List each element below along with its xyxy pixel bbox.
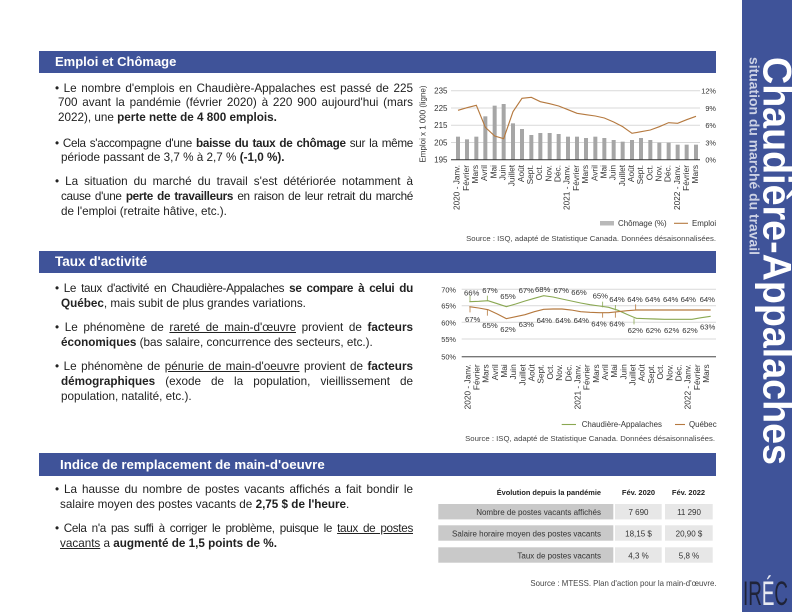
- data labels: 64%: [627, 295, 643, 304]
- data labels: 66%: [571, 288, 587, 297]
- month labels: 2021 - Janv.: [572, 364, 582, 409]
- text: salaire moyen des postes vacants de 2,75 $ de l'heure.: [60, 498, 349, 510]
- text block: indice de remplacement: [55, 482, 413, 550]
- legend: Chaudière-Appalaches: [582, 420, 662, 429]
- heading: Emploi et Chômage: Emploi et Chômage: [55, 54, 176, 69]
- data labels: 63%: [700, 323, 716, 332]
- month labels: Sept.: [525, 165, 535, 184]
- month labels: Mars: [591, 364, 601, 383]
- month labels: Juillet: [507, 164, 517, 186]
- axis labels: [441, 285, 456, 362]
- data labels: 68%: [535, 285, 551, 294]
- table row: postes vacants: [438, 504, 713, 519]
- month labels: Février: [681, 165, 691, 191]
- data labels: 62%: [628, 326, 643, 335]
- text: cause d'une perte de travailleurs en raison de leur retrait du marché: [61, 190, 413, 202]
- table row: postes vacants: Nombre de postes vacants affichés: [476, 508, 601, 517]
- data labels: 66%: [464, 288, 480, 298]
- heading: Taux d'activité: [39, 251, 716, 273]
- month labels: 2022 - Janv.: [683, 364, 693, 409]
- month labels: Juillet: [517, 364, 527, 386]
- table row: taux: 4,3 %: [628, 551, 649, 560]
- data labels: 64%: [591, 319, 607, 328]
- month labels: Avril: [589, 165, 599, 181]
- month labels: Mai: [609, 364, 619, 378]
- month labels: Nov.: [554, 364, 564, 381]
- data labels: 64%: [663, 295, 679, 304]
- month labels: Sept.: [646, 364, 656, 384]
- source: chart taux d'activité: Source : ISQ, adapté de Statistique Canada. Données désaisonnalisées.: [465, 434, 715, 443]
- month labels: Juin: [618, 364, 628, 380]
- axis labels: [418, 85, 716, 165]
- axis labels: 70%: [441, 285, 456, 294]
- month labels: Nov.: [653, 165, 663, 181]
- heading: Indice de remplacement: Indice de remplacement de main-d'oeuvre: [60, 457, 325, 472]
- axis labels: 0%: [705, 156, 716, 165]
- month labels: Déc.: [673, 364, 683, 381]
- month labels: Oct.: [545, 364, 555, 380]
- axis labels: 3%: [705, 138, 716, 148]
- axis labels: 205: [434, 138, 448, 148]
- axis labels: 65%: [441, 302, 456, 311]
- table row: postes vacants: 11 290: [677, 508, 701, 517]
- month labels: Nov.: [543, 165, 553, 181]
- text: de l'emploi (retraite hâtive, etc.).: [61, 204, 227, 218]
- month labels: Avril: [479, 165, 489, 181]
- month labels: Sept.: [635, 165, 645, 184]
- data labels: 64%: [574, 316, 589, 325]
- text: 700 avant la pandémie (février 2020) à 220 900 aujourd'hui (mars: [58, 96, 413, 109]
- sidebar subtitle: situation du marché du travail: [746, 57, 762, 255]
- axis labels: 60%: [441, 318, 456, 327]
- text: • Cela s'accompagne d'une baisse du taux de chômage sur la même: [55, 136, 413, 150]
- text: • Le taux d'activité en Chaudière-Appalaches se compare à celui du: [55, 282, 413, 294]
- month labels: Août: [626, 164, 636, 182]
- table row: salaire: [438, 525, 713, 541]
- data labels: 65%: [593, 292, 608, 301]
- text: • Le phénomène de pénurie de main-d'oeuvre provient de facteurs: [55, 360, 413, 372]
- table row: salaire: 20,90 $: [676, 529, 703, 538]
- data labels: 64%: [609, 319, 625, 328]
- month labels: Mars: [690, 165, 700, 183]
- month labels: 2020 - Janv.: [462, 364, 472, 409]
- axis labels: 215: [434, 121, 448, 130]
- table row: taux: 5,8 %: [679, 551, 699, 560]
- month labels: Juin: [608, 165, 618, 180]
- legend: Emploi: [692, 219, 716, 228]
- month labels: Février: [692, 364, 702, 390]
- legend: [600, 219, 716, 228]
- data labels: 64%: [700, 295, 715, 304]
- axis labels: 12%: [701, 87, 716, 96]
- month labels: Mars: [701, 364, 711, 383]
- month labels: Avril: [490, 364, 500, 380]
- source: chart emploi: Source : ISQ, adapté de Statistique Canada. Données désaisonnalisées.: [466, 234, 716, 243]
- text: • Le phénomène de rareté de main-d'œuvre provient de facteurs: [55, 320, 413, 334]
- data labels: [464, 285, 716, 335]
- data labels: 65%: [500, 292, 516, 301]
- month labels: Mai: [598, 165, 608, 178]
- axis labels: 225: [434, 104, 448, 113]
- month labels: Déc.: [553, 165, 563, 182]
- text: population, natalité, etc.).: [61, 390, 192, 402]
- table row: salaire: Salaire horaire moyen des postes vacants: [452, 529, 601, 538]
- data labels: 63%: [519, 320, 534, 329]
- data labels: 64%: [537, 316, 552, 325]
- month labels: [462, 364, 711, 409]
- month labels: Déc.: [563, 364, 573, 381]
- table row: taux: Taux de postes vacants: [517, 551, 601, 560]
- month labels: Oct.: [534, 165, 544, 180]
- table: évolution depuis la pandémie: Fév. 2020: [622, 488, 655, 497]
- month labels: Mai: [488, 165, 498, 178]
- month labels: Août: [516, 164, 526, 182]
- axis labels: Emploi x 1 000 (ligne): [418, 85, 428, 162]
- month labels: Août: [637, 364, 647, 381]
- text: 2022), une perte nette de 4 800 emplois.: [58, 111, 277, 124]
- axis labels: 235: [434, 87, 448, 96]
- table row: postes vacants: 7 690: [628, 508, 649, 517]
- month labels: Oct.: [644, 165, 654, 180]
- data labels: 67%: [482, 286, 498, 295]
- axis labels: 50%: [441, 353, 456, 362]
- month labels: Août: [527, 364, 537, 381]
- month labels: 2020 - Janv.: [452, 165, 462, 210]
- month labels: Mai: [499, 364, 509, 378]
- data labels: 67%: [554, 286, 569, 295]
- heading: Taux d'activité: Taux d'activité: [55, 254, 147, 269]
- axis labels: 195: [434, 156, 448, 165]
- text: • Le nombre d'emplois en Chaudière-Appalaches est passé de 225: [55, 82, 413, 94]
- chart: emploi et chômage: [418, 85, 716, 228]
- table: évolution depuis la pandémie: Évolution depuis la pandémie: [497, 488, 601, 497]
- month labels: 2022 - Janv.: [672, 165, 682, 210]
- table row: taux: [438, 547, 713, 563]
- table: évolution depuis la pandémie: Fév. 2022: [672, 488, 705, 497]
- month labels: Février: [571, 165, 581, 191]
- text: vacants a augmenté de 1,5 points de %.: [60, 536, 277, 550]
- heading: Indice de remplacement: [39, 453, 716, 476]
- chart: taux d'activité: [441, 285, 717, 429]
- data labels: 64%: [555, 316, 571, 325]
- month labels: Juillet: [617, 164, 627, 186]
- axis labels: 6%: [705, 121, 716, 130]
- source: table: Source : MTESS. Plan d'action pour la main-d'œuvre.: [530, 579, 716, 588]
- data labels: 62%: [500, 325, 516, 334]
- data labels: 65%: [482, 321, 498, 330]
- text: démographiques (exode de la population, vieillissement de: [61, 374, 413, 388]
- month labels: Juillet: [628, 364, 638, 386]
- text: • La situation du marché du travail s'est détériorée notamment à: [55, 174, 413, 188]
- month labels: Oct.: [655, 364, 665, 380]
- data labels: 64%: [681, 295, 696, 304]
- data labels: 67%: [465, 315, 481, 324]
- month labels: Avril: [600, 364, 610, 380]
- text: Québec, mais subit de plus grandes variations.: [61, 296, 306, 310]
- text block: taux d'activité: [55, 282, 413, 402]
- text: • Cela n'a pas suffi à corriger le problème, puisque le taux de postes: [55, 522, 413, 534]
- month labels: Février: [461, 165, 471, 191]
- data labels: 62%: [646, 326, 661, 335]
- month labels: Juin: [508, 364, 518, 380]
- text: • La hausse du nombre de postes vacants affichés a fait bondir le: [55, 482, 413, 496]
- heading: Emploi et Chômage: [39, 51, 716, 73]
- text: période passant de 3,7 % à 2,7 % (-1,0 %).: [61, 150, 284, 164]
- month labels: Février: [472, 364, 482, 390]
- data labels: 64%: [645, 295, 661, 304]
- legend: Québec: [689, 420, 717, 429]
- month labels: Février: [582, 364, 592, 390]
- month labels: Sept.: [536, 364, 546, 384]
- table row: salaire: 18,15 $: [625, 529, 652, 538]
- month labels: Mars: [470, 165, 480, 183]
- axis labels: 55%: [441, 335, 456, 344]
- month labels: Mars: [481, 364, 491, 383]
- legend: Chômage (%): [618, 219, 667, 228]
- table: évolution depuis la pandémie: [438, 488, 713, 563]
- legend: [562, 420, 717, 429]
- month labels: Mars: [580, 165, 590, 183]
- data labels: 67%: [519, 286, 534, 295]
- month labels: Déc.: [663, 165, 673, 182]
- month labels: 2021 - Janv.: [562, 165, 572, 210]
- data labels: 64%: [609, 295, 625, 304]
- month labels: Nov.: [664, 364, 674, 381]
- data labels: 62%: [664, 326, 680, 335]
- text block: emploi: [55, 82, 413, 218]
- month labels: Juin: [498, 165, 508, 180]
- text: économiques (bas salaire, concurrence des secteurs, etc.).: [61, 336, 373, 348]
- data labels: 62%: [682, 326, 698, 335]
- month labels: [452, 164, 700, 210]
- axis labels: 9%: [705, 104, 716, 113]
